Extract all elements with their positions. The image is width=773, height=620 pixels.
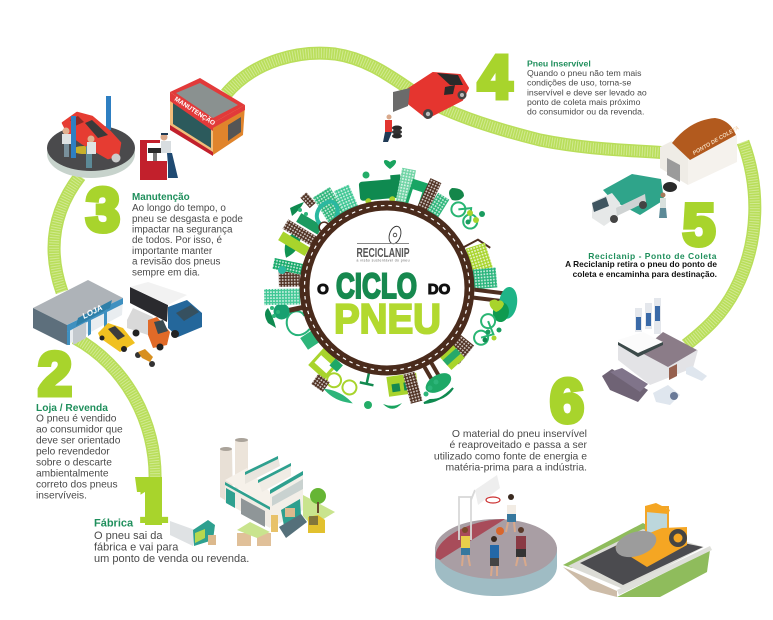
step 2 text: Loja / Revenda: ambientalmente [36, 468, 109, 480]
title: O Ciclo do Pneu [317, 267, 451, 342]
step 1 number: 1 [136, 469, 170, 536]
icon: basketball court [435, 475, 557, 596]
step 4 number: 4 [478, 43, 512, 111]
title: O Ciclo do Pneu: DO [428, 281, 451, 298]
step 3 number: 3 [86, 176, 120, 244]
tyre track path connecting the steps [54, 53, 755, 482]
step 3 text: Manutenção: Manutenção [132, 192, 190, 203]
step 2 text: Loja / Revenda: deve ser orientado [36, 436, 121, 446]
icon: collection point warehouse: PONTO DE COLETA [692, 125, 740, 157]
step 2 text: Loja / Revenda [36, 403, 123, 502]
step 6 text: reuse of material: O material do pneu inservível [452, 429, 587, 440]
step 3 text: Manutenção: pneu se desgasta e pode [132, 214, 243, 225]
step 4 text: Pneu Inservível: do consumidor ou da revenda. [527, 106, 644, 116]
step 4 text: Pneu Inservível: ponto de coleta mais próximo [527, 97, 641, 107]
Reciclanip logo: a visão sustentável do pneu [356, 258, 410, 262]
step 6 text: reuse of material: utilizado como fonte de energia e [434, 452, 587, 462]
step 6 text: reuse of material: é reaproveitado e passa a ser [450, 440, 588, 451]
step 6 number: 6 [550, 367, 584, 435]
step 3 text: Manutenção: importante manter [132, 246, 213, 257]
step 4 text: Pneu Inservível: Quando o pneu não tem mais [527, 68, 642, 78]
step 6 text: reuse of material: matéria-prima para a indústria. [446, 462, 587, 474]
step 2 text: Loja / Revenda: ao consumidor que [36, 424, 123, 436]
step 2 text: Loja / Revenda: sobre o descarte [36, 458, 112, 468]
icon: store building LOJA [33, 280, 123, 345]
step 2 number: 2 [38, 340, 72, 408]
step 1 text: Fábrica: fábrica e vai para [94, 542, 179, 554]
icon: garage lift with red car [47, 96, 135, 178]
step 4 text: Pneu Inservível: condições de uso, torna-se [527, 78, 631, 88]
icon: maintenance workshop: MANUTENÇÃO [173, 94, 217, 127]
title: O Ciclo do Pneu: O [317, 281, 329, 298]
step 2 text: Loja / Revenda: O pneu é vendido [36, 414, 117, 424]
icon: green collection truck and worker [592, 174, 677, 226]
Reciclanip logo: RECICLANIP [356, 245, 410, 260]
title: O Ciclo do Pneu: CICLO [336, 267, 417, 306]
step 3 text: Manutenção: a revisão dos pneus [132, 256, 220, 268]
step 5 text: Reciclanip - Ponto de Coleta: coleta e encaminha para destinação. [573, 269, 717, 279]
step 3 text: Manutenção [132, 192, 243, 278]
road ring [304, 206, 470, 370]
icon: red van collecting tyres [393, 73, 468, 119]
step 4 text: Pneu Inservível [527, 58, 647, 116]
icon: person with tyres [383, 114, 402, 142]
step 1 text: Fábrica [94, 518, 249, 565]
step 6 text: reuse of material [434, 429, 588, 474]
step 4 text: Pneu Inservível: Pneu Inservível [527, 58, 591, 68]
icon: tyre changing machine and mechanic [140, 133, 178, 180]
step 5 text: Reciclanip - Ponto de Coleta [565, 251, 717, 279]
step 3 text: Manutenção: de todos. Por isso, é [132, 235, 223, 246]
Reciclanip logo [356, 225, 410, 262]
step 5 text: Reciclanip - Ponto de Coleta: A Reciclanip retira o pneu do ponto de [565, 259, 717, 269]
step 3 text: Manutenção: Ao longo do tempo, o [132, 203, 226, 214]
step 2 text: Loja / Revenda: pelo revendedor [36, 446, 110, 458]
step 2 text: Loja / Revenda: correto dos pneus [36, 480, 118, 490]
step 4 text: Pneu Inservível: inservível e deve ser levado ao [527, 88, 647, 98]
step 3 text: Manutenção: sempre em dia. [132, 268, 200, 278]
step 2 text: Loja / Revenda: inservíveis. [36, 490, 87, 502]
step 1 text: Fábrica: um ponto de venda ou revenda. [94, 553, 249, 565]
icon: energy plant [602, 298, 707, 405]
icon: maintenance workshop [170, 78, 245, 156]
city illustrations around the ring [264, 160, 519, 409]
icon: tyre factory [170, 438, 335, 546]
icon: collection point warehouse [660, 118, 740, 185]
step 3 text: Manutenção: impactar na segurança [132, 224, 233, 236]
icon: store building LOJA: LOJA [81, 303, 104, 321]
step 5 text: Reciclanip - Ponto de Coleta: Reciclanip - Ponto de Coleta [588, 251, 717, 261]
step 2 text: Loja / Revenda: Loja / Revenda [36, 403, 108, 414]
step 1 text: Fábrica: O pneu sai da [94, 530, 163, 542]
step 1 text: Fábrica: Fábrica [94, 518, 134, 530]
step 5 number: 5 [683, 193, 715, 258]
icon: delivery vehicles [98, 282, 202, 367]
title: O Ciclo do Pneu: PNEU [334, 295, 441, 342]
icon: road roller on asphalt [563, 503, 712, 597]
